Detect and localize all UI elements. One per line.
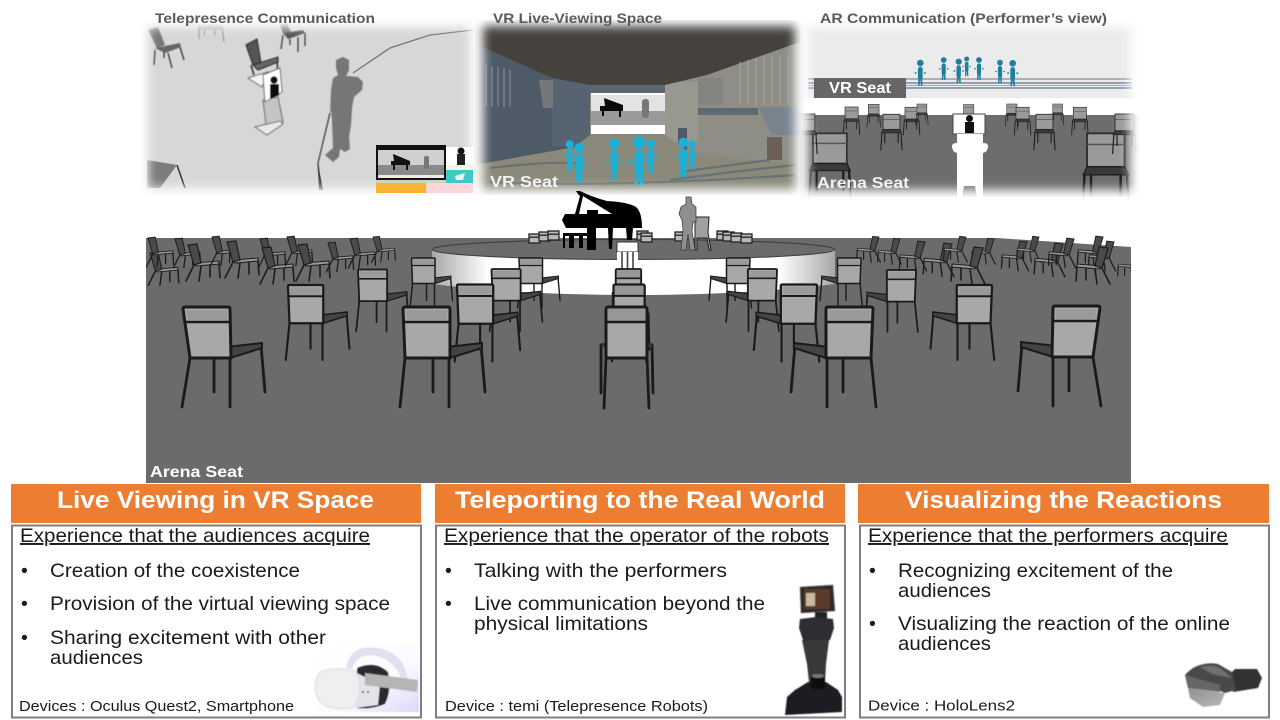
- label: VR Seat box: VR Seat: [829, 80, 892, 97]
- stage edge lines: [318, 30, 473, 188]
- standing performer: [325, 57, 363, 162]
- bullet list: •: [21, 627, 28, 649]
- on-stage video screen: [591, 93, 665, 134]
- device note: Device : HoloLens2: [868, 698, 1015, 714]
- panel: Teleporting to the Real World: [435, 484, 845, 718]
- bullet list: [21, 560, 390, 669]
- bullet list: Talking with the performers: [474, 560, 727, 582]
- header bar: Visualizing the Reactions: [905, 487, 1222, 514]
- inset screen view: [376, 145, 473, 193]
- AR avatars: [915, 56, 1018, 86]
- content box: [860, 526, 1269, 718]
- bullet list: audiences: [898, 633, 991, 655]
- bullet list: [445, 560, 765, 635]
- bullet list: Live communication beyond the: [474, 593, 765, 615]
- scene background with chairs, robot and performer: [140, 20, 480, 195]
- panel: Live Viewing in VR Space: [11, 484, 421, 718]
- VR avatars: [563, 136, 698, 186]
- content box: [12, 526, 421, 718]
- near chairs left: [182, 258, 560, 407]
- panel: Visualizing the Reactions: [858, 484, 1269, 718]
- bullet list: audiences: [898, 580, 991, 602]
- white telepresence robot: [952, 114, 988, 197]
- bullet list: •: [869, 613, 876, 635]
- bullet list: •: [445, 593, 452, 615]
- header bar: [11, 484, 421, 523]
- header bar: [435, 484, 845, 523]
- bullet list: physical limitations: [474, 613, 648, 635]
- bullet list: Visualizing the reaction of the online: [898, 613, 1230, 635]
- near chairs right: [709, 258, 1101, 407]
- label: VR Seat: VR Seat: [490, 174, 559, 191]
- telepresence robot: [248, 68, 283, 135]
- device note: Device : temi (Telepresence Robots): [445, 698, 708, 715]
- robot at stage front: [617, 242, 638, 270]
- content box: [436, 526, 845, 718]
- centre chairs: [601, 269, 653, 408]
- label: Arena Seat: Arena Seat: [150, 464, 244, 481]
- heading: VR live-viewing space: VR Live-Viewing Space: [493, 10, 662, 26]
- icon: HoloLens headset: [1185, 663, 1262, 707]
- heading: telepresence communication: Telepresence Communication: [155, 10, 375, 26]
- grand piano silhouette: [562, 191, 642, 250]
- header bar: Live Viewing in VR Space: [57, 487, 374, 514]
- arena floor: [146, 238, 1131, 483]
- panel: AR communication performer's view: [800, 13, 1138, 198]
- bullet list: •: [445, 560, 452, 582]
- AR scene: [800, 26, 1138, 198]
- subheading: Experience that the operator of the robots: [444, 525, 829, 547]
- subheading: Experience that the audiences acquire: [20, 525, 370, 547]
- bullet list: [869, 560, 1230, 655]
- bullet list: audiences: [50, 647, 143, 669]
- far rows of chairs right: [857, 236, 1141, 284]
- device note: Devices : Oculus Quest2, Smartphone: [19, 698, 294, 715]
- virtual hall interior: [475, 20, 805, 195]
- header bar: [858, 484, 1269, 523]
- icon: VR headset: [315, 646, 419, 712]
- performer on stage: [679, 197, 711, 250]
- chairs around the robot: [148, 23, 305, 75]
- heading: AR communication: AR Communication (Performer’s view): [820, 10, 1107, 26]
- circular stage: [432, 240, 835, 295]
- bullet list: Provision of the virtual viewing space: [50, 593, 390, 615]
- table corner: [147, 160, 177, 188]
- bullet list: Creation of the coexistence: [50, 560, 300, 582]
- bullet list: Recognizing excitement of the: [898, 560, 1173, 582]
- label: Arena Seat: Arena Seat: [817, 175, 910, 192]
- bullet list: •: [21, 560, 28, 582]
- panel: VR live-viewing space scene: [475, 10, 805, 195]
- gift boxes on stage: [529, 231, 752, 243]
- far rows of chairs left: [146, 236, 395, 285]
- bullet list: •: [21, 593, 28, 615]
- arena chairs seen from the stage: [800, 104, 1136, 198]
- subheading: Experience that the performers acquire: [868, 525, 1228, 547]
- bullet list: •: [869, 560, 876, 582]
- label: VR Seat box: [814, 78, 906, 98]
- panel: telepresence communication scene: [140, 10, 480, 195]
- header bar: Teleporting to the Real World: [455, 487, 825, 514]
- icon: temi robot: [785, 585, 842, 715]
- bullet list: Sharing excitement with other: [50, 627, 327, 649]
- panel: arena seat main view: [146, 191, 1141, 483]
